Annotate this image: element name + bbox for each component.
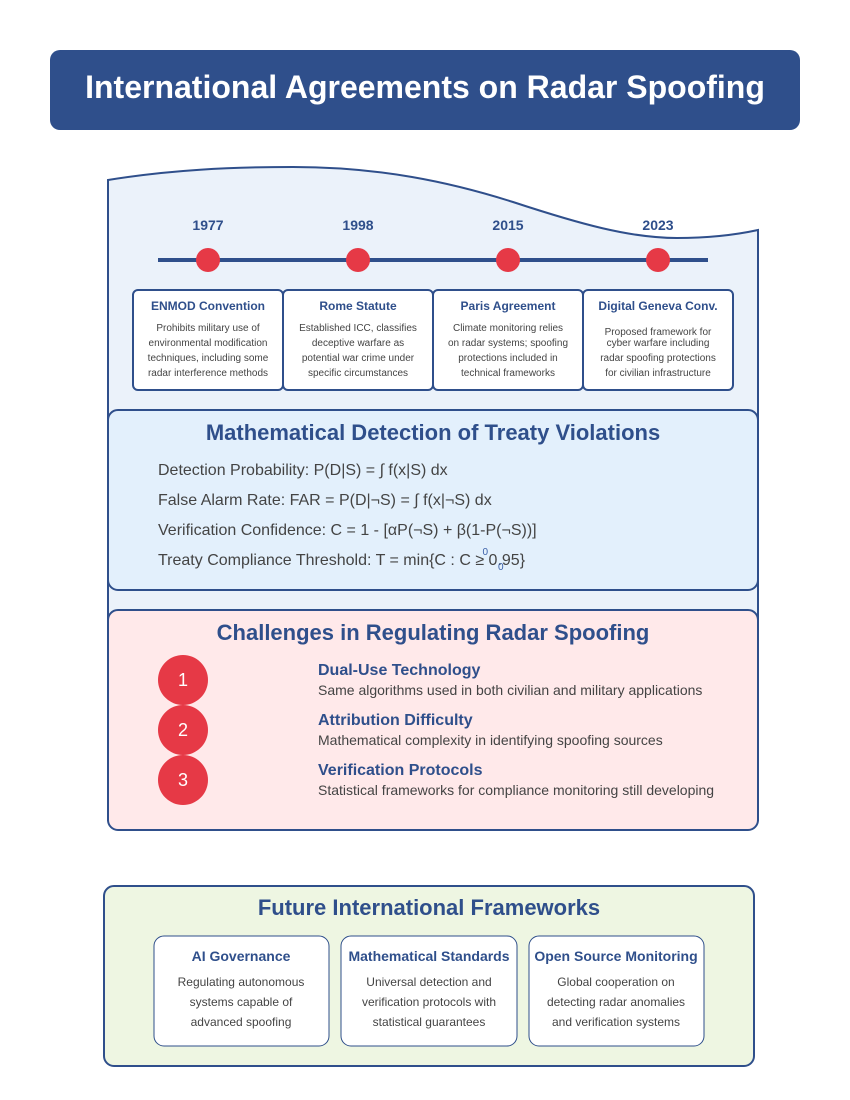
card: AI Governance: [154, 936, 329, 1046]
card: ENMOD Convention: Prohibits military use of: [156, 323, 260, 334]
card: Digital Geneva Conv.: for civilian infrastructure: [605, 368, 711, 379]
timeline marker 2015: [492, 217, 524, 272]
formulas: Verification Confidence: C = 1 - [αP(¬S) + β(1-P(¬S))]: [158, 522, 537, 539]
challenge 2: 2: [178, 720, 188, 740]
challenge 3: Statistical frameworks for compliance monitoring still developing: [318, 782, 714, 798]
card: ENMOD Convention: radar interference methods: [148, 368, 268, 379]
card: AI Governance: AI Governance: [192, 948, 291, 964]
card: Paris Agreement: Climate monitoring relies: [453, 323, 563, 334]
card: Paris Agreement: protections included in: [458, 353, 558, 364]
card: Mathematical Standards: [341, 936, 517, 1046]
card: ENMOD Convention: [133, 290, 283, 390]
card: ENMOD Convention: techniques, including some: [148, 353, 269, 364]
card: Mathematical Standards: statistical guarantees: [373, 1015, 485, 1029]
formulas: False Alarm Rate: FAR = P(D|¬S) = ∫ f(x|¬S) dx: [158, 492, 492, 509]
card: Digital Geneva Conv.: radar spoofing protections: [600, 353, 716, 364]
challenge 2: Mathematical complexity in identifying spoofing sources: [318, 732, 663, 748]
card: Rome Statute: deceptive warfare as: [312, 338, 404, 349]
challenge 3: Verification Protocols: [318, 762, 483, 779]
card: ENMOD Convention: ENMOD Convention: [151, 299, 265, 313]
card: Paris Agreement: technical frameworks: [461, 368, 555, 379]
challenge 1: Dual-Use Technology: [318, 662, 480, 679]
card: AI Governance: advanced spoofing: [191, 1015, 291, 1029]
challenge 2: [158, 705, 663, 755]
challenge 3: 3: [178, 770, 188, 790]
card: Rome Statute: potential war crime under: [302, 353, 415, 364]
challenge 1: 1: [178, 670, 188, 690]
card: Digital Geneva Conv.: Digital Geneva Conv.: [598, 299, 718, 313]
card: Open Source Monitoring: detecting radar anomalies: [547, 995, 685, 1009]
panel: challenges: [108, 610, 758, 830]
panel: timeline wave background: [108, 167, 758, 820]
card: AI Governance: systems capable of: [190, 995, 293, 1009]
title banner: International Agreements on Radar Spoofing: [85, 69, 765, 105]
challenge 1: [158, 655, 702, 705]
card: Mathematical Standards: Mathematical Standards: [348, 948, 510, 964]
card: Mathematical Standards: verification protocols with: [362, 995, 496, 1009]
panel: future frameworks: [104, 886, 754, 1066]
card: AI Governance: Regulating autonomous: [178, 975, 304, 989]
formulas: Treaty Compliance Threshold: T = min{C : C ≥ 0.95}: [158, 552, 526, 569]
card: Digital Geneva Conv.: Proposed framework for: [605, 327, 712, 338]
card: ENMOD Convention: environmental modification: [149, 338, 267, 349]
card: Digital Geneva Conv.: cyber warfare including: [607, 338, 709, 349]
card: Open Source Monitoring: Open Source Monitoring: [534, 948, 698, 964]
timeline: [158, 217, 708, 272]
timeline marker 1998: [342, 217, 374, 272]
card: Rome Statute: specific circumstances: [308, 368, 408, 379]
formulas: Detection Probability: P(D|S) = ∫ f(x|S) dx: [158, 462, 448, 479]
card: Paris Agreement: Paris Agreement: [461, 299, 555, 313]
timeline marker 2015: 2015: [492, 217, 524, 233]
timeline marker 1977: 1977: [192, 217, 224, 233]
card: Rome Statute: [283, 290, 433, 390]
formulas: [158, 462, 537, 573]
timeline marker 1998: 1998: [342, 217, 374, 233]
formulas: 0: [482, 547, 488, 558]
card: Rome Statute: Rome Statute: [319, 299, 397, 313]
challenge 1: Same algorithms used in both civilian and military applications: [318, 682, 702, 698]
card: Open Source Monitoring: Global cooperation on: [557, 975, 675, 989]
card: Open Source Monitoring: [529, 936, 704, 1046]
card: Digital Geneva Conv.: [583, 290, 733, 390]
card: Mathematical Standards: Universal detection and: [366, 975, 492, 989]
timeline marker 2023: 2023: [642, 217, 674, 233]
card: Paris Agreement: on radar systems; spoofing: [448, 338, 568, 349]
title banner: [50, 50, 800, 130]
heading: mathematical detection: Mathematical Detection of Treaty Violations: [206, 420, 660, 445]
panel: mathematical detection: [108, 410, 758, 590]
timeline marker 2023: [642, 217, 674, 272]
challenge 2: Attribution Difficulty: [318, 712, 473, 729]
card: Rome Statute: Established ICC, classifies: [299, 323, 417, 334]
timeline marker 1977: [192, 217, 224, 272]
challenge 3: [158, 755, 714, 805]
heading: challenges: Challenges in Regulating Radar Spoofing: [217, 620, 649, 645]
formulas: 0: [498, 562, 504, 573]
card: Paris Agreement: [433, 290, 583, 390]
card: Open Source Monitoring: and verification systems: [552, 1015, 680, 1029]
heading: future frameworks: Future International Frameworks: [258, 895, 600, 920]
